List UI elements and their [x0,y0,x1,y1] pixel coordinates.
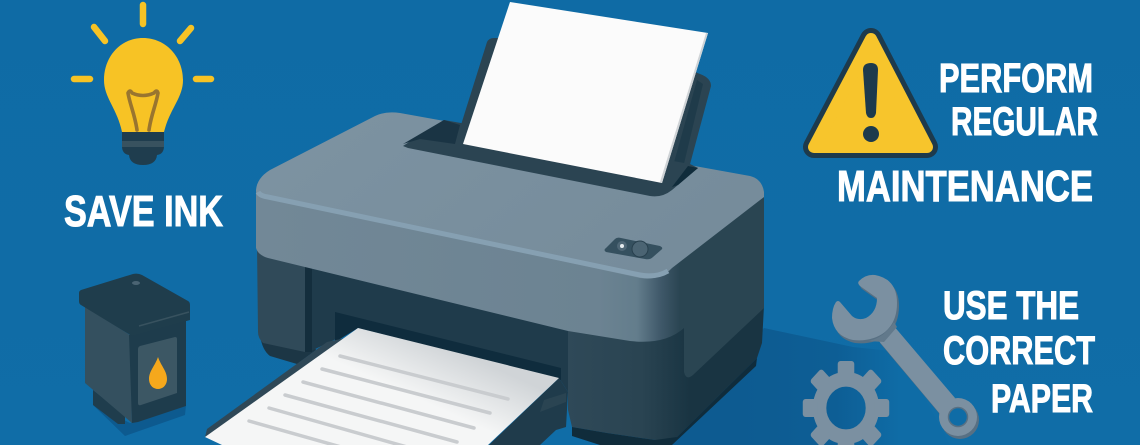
front band [256,190,684,342]
output cavity [305,262,570,395]
icon: light bulb [74,5,211,165]
heading: use the correct paper: USE THE [943,284,1079,328]
wrench head [832,275,897,340]
heading: use the correct paper: CORRECT [943,329,1095,373]
input paper [463,2,708,183]
wrench shadow [834,278,979,439]
left foot [260,335,316,364]
icon: ink drop [149,357,167,389]
heading: perform regular maintenance: PERFORM [939,55,1093,101]
wrench joint shadow [868,322,897,342]
icon: gear [803,361,889,445]
bulb glass [104,38,183,132]
bulb filament [128,91,158,130]
cavity deep [335,312,561,380]
wrench ring hole [948,408,968,426]
cartridge left side [85,306,132,423]
heading: use the correct paper [943,284,1095,421]
printed text lines [249,356,508,445]
heading: save ink: SAVE INK [64,187,223,236]
left leg [257,245,305,352]
right paper holder [660,70,711,187]
left paper holder [455,38,500,146]
right foot [572,358,757,445]
printer shadow [640,328,950,445]
bulb base [122,132,164,165]
heading: perform regular maintenance [837,55,1098,211]
wrench handle [878,325,955,415]
cartridge nozzle [93,390,125,424]
top edge highlight [258,192,668,276]
right face [650,197,764,377]
control panel [604,238,662,259]
paper slot [403,120,698,196]
cartridge front [129,318,186,423]
wrench ring [939,398,977,436]
cartridge shadow [93,405,186,436]
right lower body [568,306,764,441]
exclamation mark [863,63,878,118]
top surface [256,112,764,279]
icon: warning triangle [814,39,927,147]
cartridge lid [79,274,190,336]
icon: wrench [832,275,979,439]
indicator light [617,241,627,251]
output tray [205,338,345,437]
output paper [205,328,559,445]
bulb rays [74,5,211,79]
tray right side [489,378,568,445]
icon: ink cartridge [79,274,190,436]
printer [205,2,764,445]
cartridge label [138,337,177,405]
power button [632,241,648,257]
heading: use the correct paper: PAPER [991,377,1093,421]
